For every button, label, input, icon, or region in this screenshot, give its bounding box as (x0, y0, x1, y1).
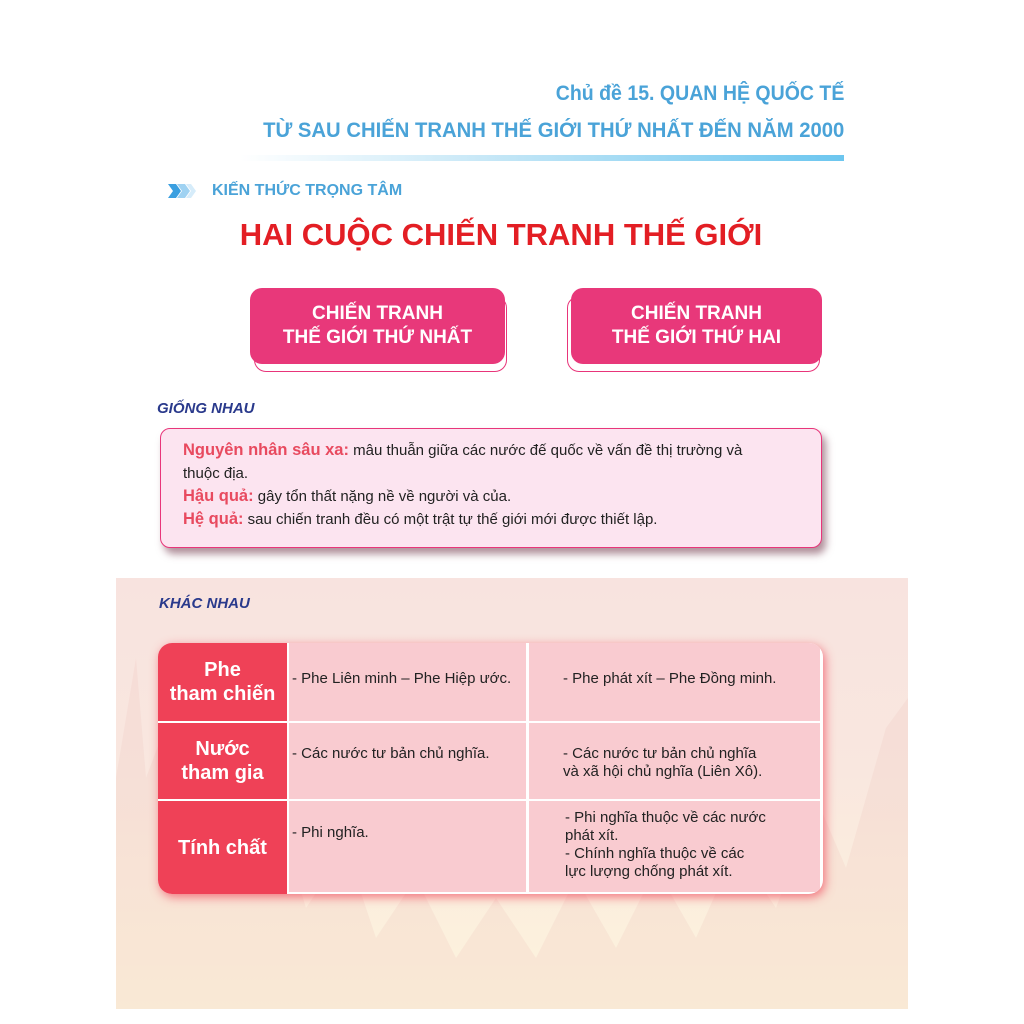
panel: differences background (116, 578, 908, 1009)
section label: KIẾN THỨC TRỌNG TÂM (212, 182, 402, 199)
button: WW2: CHIẾN TRANH (631, 303, 762, 324)
table: lực lượng chống phát xít. (565, 863, 733, 880)
button: WW1: CHIẾN TRANH (312, 303, 443, 324)
panel: similarities (160, 428, 822, 548)
table: phát xít. (565, 827, 618, 844)
header: phe tham chiến: Phe (204, 659, 241, 681)
icon: chevrons (168, 184, 196, 198)
heading: khác nhau: KHÁC NHAU (159, 595, 250, 612)
title underline (240, 155, 844, 161)
main heading: HAI CUỘC CHIẾN TRANH THẾ GIỚI (240, 217, 762, 252)
button: WW2 (567, 288, 822, 372)
panel: similarities: Nguyên nhân sâu xa: mâu thuẫn giữa các nước đế quốc về vấn đề thị trường và (183, 441, 742, 459)
button: WW1 (250, 288, 507, 372)
button: WW1: THẾ GIỚI THỨ NHẤT (283, 327, 472, 348)
table: - Phi nghĩa thuộc về các nước (565, 809, 766, 826)
header: nước tham gia (158, 723, 287, 799)
table: - Phi nghĩa. (292, 824, 369, 841)
table: - Phe phát xít – Phe Đồng minh. (563, 670, 776, 687)
table: - Các nước tư bản chủ nghĩa (563, 745, 756, 762)
button: WW2: THẾ GIỚI THỨ HAI (612, 327, 781, 348)
header: nước tham gia: Nước (195, 738, 250, 760)
table (158, 643, 823, 894)
panel: similarities: thuộc địa. (183, 465, 248, 482)
panel: similarities: Hệ quả: sau chiến tranh đều có một trật tự thế giới mới được thiết lập. (183, 510, 657, 528)
table: - Chính nghĩa thuộc về các (565, 845, 744, 862)
header: nước tham gia: tham gia (181, 762, 264, 784)
heading: giống nhau: GIỐNG NHAU (157, 400, 254, 417)
header: tính chất: Tính chất (178, 836, 267, 858)
cells: - Phe Liên minh – Phe Hiệp ước. (292, 670, 511, 687)
table: và xã hội chủ nghĩa (Liên Xô). (563, 763, 762, 780)
table: - Các nước tư bản chủ nghĩa. (292, 745, 490, 762)
panel: similarities: Hậu quả: gây tổn thất nặng nề về người và của. (183, 487, 511, 505)
header: tính chất (158, 801, 287, 894)
header: phe tham chiến (158, 643, 287, 721)
header: phe tham chiến: tham chiến (170, 683, 275, 705)
title line 1: Chủ đề 15. QUAN HỆ QUỐC TẾ (555, 82, 844, 105)
title line 2: TỪ SAU CHIẾN TRANH THẾ GIỚI THỨ NHẤT ĐẾN NĂM 2000 (263, 119, 844, 142)
